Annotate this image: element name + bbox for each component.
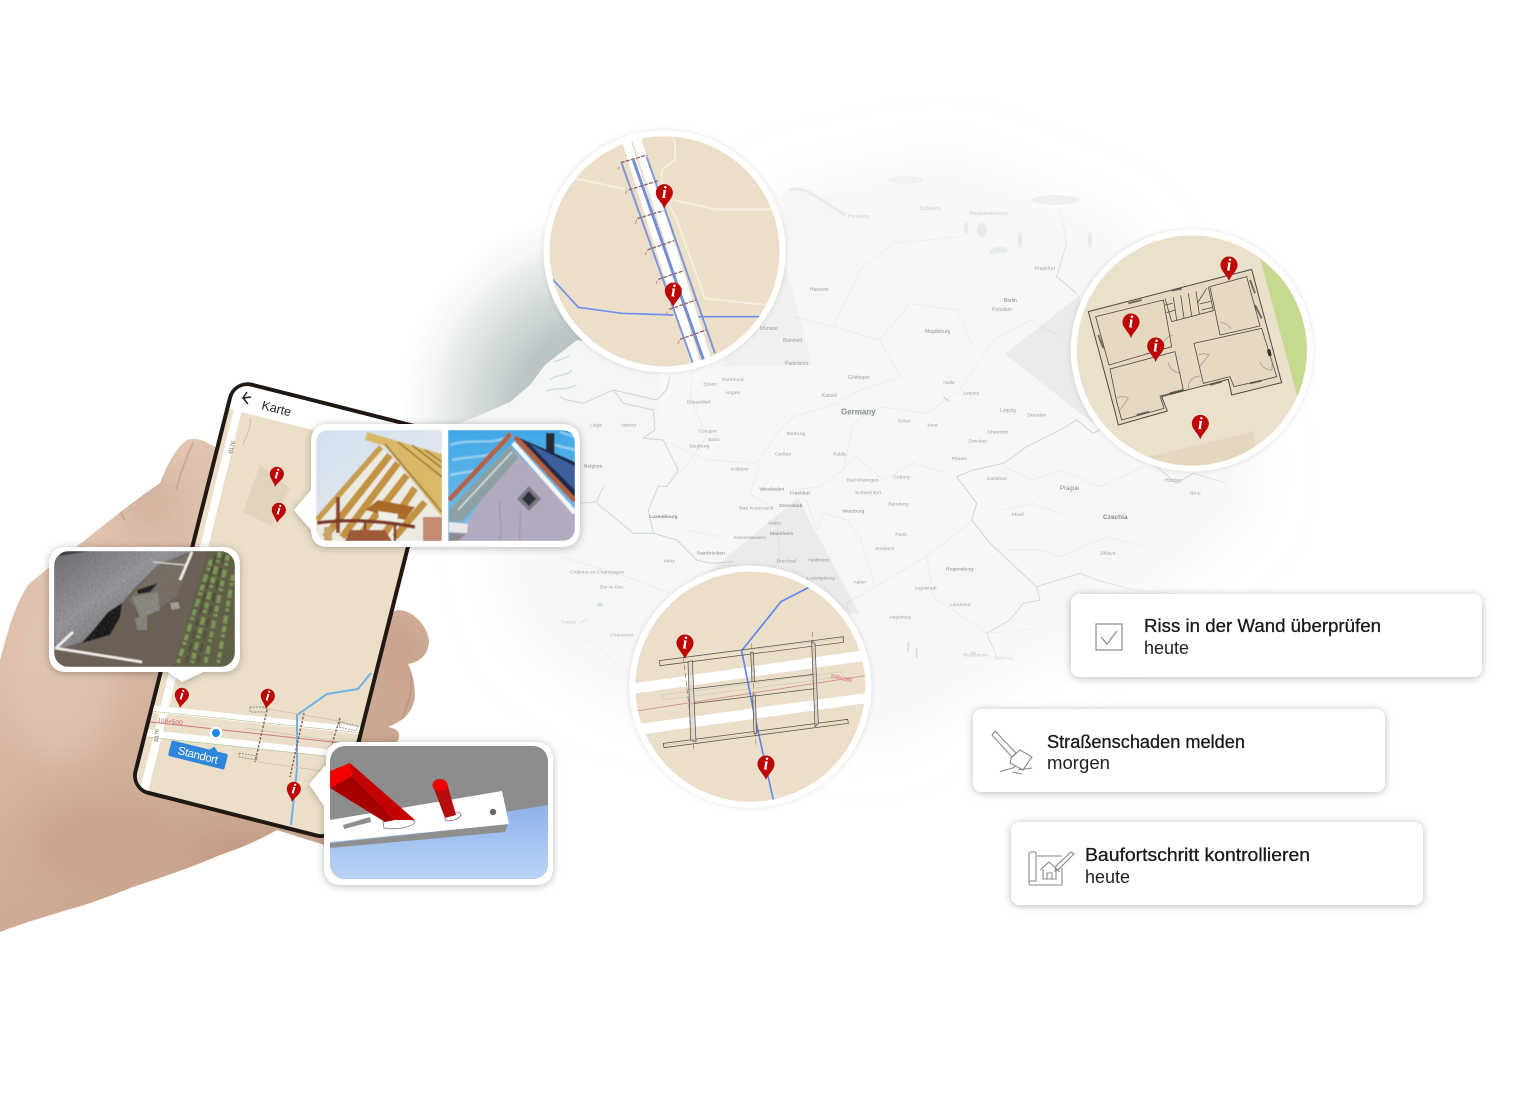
background map of Germany and neighbours: Ansbach xyxy=(875,546,895,552)
circle: road crossing map xyxy=(629,566,871,808)
background map of Germany and neighbours: Belgium xyxy=(584,463,602,468)
background map of Germany and neighbours: Liège xyxy=(590,423,602,429)
background map of Germany and neighbours: Cologne xyxy=(698,428,717,434)
background map of Germany and neighbours: Berlin xyxy=(1004,298,1017,304)
background map of Germany and neighbours: Aalen xyxy=(853,580,866,586)
background map of Germany and neighbours: Saarbrücken xyxy=(697,550,725,556)
background map of Germany and neighbours: Salzburg xyxy=(994,655,1014,661)
phone map screen: 108+500 xyxy=(157,717,183,727)
background map of Germany and neighbours: Czechia xyxy=(1103,514,1128,521)
pin: i xyxy=(1227,255,1232,274)
callout: road damage photo xyxy=(49,547,240,682)
pin xyxy=(656,183,673,209)
background map of Germany and neighbours: Ingolstadt xyxy=(915,585,937,591)
task card: Baufortschritt xyxy=(1011,822,1423,905)
background map of Germany and neighbours: Bamberg xyxy=(888,502,909,508)
background map of Germany and neighbours: Mannheim xyxy=(770,531,793,537)
background map of Germany and neighbours: Plauen xyxy=(952,456,967,462)
callout: roof photos xyxy=(294,424,580,547)
phone header label: Karte xyxy=(260,398,293,419)
pin: i xyxy=(764,754,769,773)
background map of Germany and neighbours: Hanover xyxy=(810,287,829,293)
background map of Germany and neighbours: Hamburg xyxy=(848,214,869,220)
background map of Germany and neighbours: Darmstadt xyxy=(779,503,803,509)
background map of Germany and neighbours: Fulda xyxy=(833,451,846,457)
background map of Germany and neighbours xyxy=(423,176,1227,708)
background map of Germany and neighbours: Würzburg xyxy=(843,509,864,515)
pin: i xyxy=(274,466,280,483)
background map of Germany and neighbours: Erfurt xyxy=(898,418,911,424)
icon: checkbox xyxy=(1096,624,1122,650)
background map of Germany and neighbours: Germany xyxy=(841,408,876,417)
task card: Straßenschaden xyxy=(973,709,1385,792)
background map of Germany and neighbours: Kaiserslautern xyxy=(734,535,766,541)
circle: road crossing map: 100+280 xyxy=(830,673,853,684)
background map of Germany and neighbours: Magdeburg xyxy=(925,329,951,335)
background map of Germany and neighbours: Leipzig xyxy=(1000,408,1016,414)
background map of Germany and neighbours: Jena xyxy=(927,423,938,429)
background map of Germany and neighbours: Carlsbad xyxy=(987,476,1007,482)
background map of Germany and neighbours: Coburg xyxy=(893,474,910,480)
card title: Straßenschaden melden xyxy=(1047,732,1245,752)
pin xyxy=(173,687,190,709)
background map of Germany and neighbours: Paderborn xyxy=(785,361,809,367)
pin xyxy=(757,754,774,780)
background map of Germany and neighbours: Schweinfurt xyxy=(855,490,882,496)
circle: road corridor map xyxy=(543,130,785,372)
pin xyxy=(285,781,302,803)
background map of Germany and neighbours: Metz xyxy=(664,558,675,564)
phone map screen xyxy=(136,386,406,834)
phone map screen: B176 xyxy=(228,441,237,454)
background map of Germany and neighbours: Chaumont xyxy=(610,633,634,639)
background map of Germany and neighbours: Wiesbaden xyxy=(759,487,784,493)
background map of Germany and neighbours: Ludwigsburg xyxy=(807,575,835,581)
background map of Germany and neighbours: Plzeň xyxy=(1012,512,1024,518)
phone map screen: B176 xyxy=(154,729,161,742)
background map of Germany and neighbours: Regensburg xyxy=(946,566,973,572)
background map of Germany and neighbours: Châlons-en-Champagne xyxy=(570,569,625,575)
background map of Germany and neighbours: Bar-le-Duc xyxy=(600,584,624,590)
card due date: heute xyxy=(1085,867,1130,887)
circle: floor plan map xyxy=(1071,229,1327,480)
background map of Germany and neighbours: Düsseldorf xyxy=(687,399,711,405)
background map of Germany and neighbours: Koblenz xyxy=(731,467,749,473)
pin xyxy=(268,466,285,488)
location dot xyxy=(210,726,222,740)
card due date: heute xyxy=(1144,638,1189,658)
background map of Germany and neighbours: Namur xyxy=(621,423,637,429)
map wedge: circle three xyxy=(705,498,860,615)
pin: i xyxy=(683,633,688,652)
background map of Germany and neighbours: Luxembourg xyxy=(649,514,678,519)
card due date: morgen xyxy=(1047,753,1110,773)
pin xyxy=(665,281,682,307)
pin: i xyxy=(662,183,667,202)
map wedge: circle two xyxy=(1005,295,1095,425)
pin: i xyxy=(179,687,185,704)
background map of Germany and neighbours: Jihlava xyxy=(1100,551,1116,557)
background map of Germany and neighbours: Halle xyxy=(943,380,955,386)
background map of Germany and neighbours: Landshut xyxy=(950,602,971,608)
pin xyxy=(1220,255,1237,281)
background map of Germany and neighbours: Troyes xyxy=(561,619,577,625)
background map of Germany and neighbours: Frankfurt xyxy=(1035,266,1056,272)
pin: i xyxy=(1198,414,1203,433)
background map of Germany and neighbours: Prague xyxy=(1060,486,1080,492)
map wedge: circle one xyxy=(720,262,812,367)
background map of Germany and neighbours: Bad Kissingen xyxy=(847,478,879,484)
hand holding phone xyxy=(0,430,440,940)
pin: i xyxy=(1153,336,1158,355)
pin: i xyxy=(265,688,271,705)
background map of Germany and neighbours: Rosenheim xyxy=(963,653,989,659)
pin: i xyxy=(291,781,297,798)
callout: 3D model view xyxy=(309,742,553,885)
photo: house gable xyxy=(448,430,575,541)
task card: Riss in der Wand xyxy=(1071,594,1482,677)
background map of Germany and neighbours: Kassel xyxy=(822,393,837,399)
background map of Germany and neighbours: Bielefeld xyxy=(783,338,802,344)
icon: house plan and pencil xyxy=(1029,852,1074,885)
location label: Standort xyxy=(176,745,220,767)
background map of Germany and neighbours: Potsdam xyxy=(992,307,1012,313)
photo: roof framing xyxy=(316,430,442,541)
background map of Germany and neighbours: Dortmund xyxy=(722,377,744,383)
pin: i xyxy=(671,281,676,300)
background map of Germany and neighbours: Neubrandenburg xyxy=(970,211,1008,217)
icon: hammer xyxy=(992,731,1032,774)
background map of Germany and neighbours: Brno xyxy=(1190,491,1201,497)
pin xyxy=(676,633,693,659)
background map of Germany and neighbours: Frankfurt xyxy=(790,490,811,496)
pin xyxy=(1192,414,1209,439)
background map of Germany and neighbours: Siegburg xyxy=(689,443,710,449)
background map of Germany and neighbours: Münster xyxy=(760,326,778,332)
background map of Germany and neighbours: Gießen xyxy=(775,451,792,457)
background map of Germany and neighbours: Heilbronn xyxy=(808,557,830,563)
background map of Germany and neighbours: Hradec xyxy=(1165,478,1182,484)
pin xyxy=(1147,336,1164,362)
background map of Germany and neighbours: Bruchsal xyxy=(777,559,796,565)
pin: i xyxy=(276,502,282,519)
background map of Germany and neighbours: Chemnitz xyxy=(987,430,1009,436)
location label xyxy=(168,736,229,770)
background map of Germany and neighbours: Dresden xyxy=(1027,413,1046,419)
background map of Germany and neighbours: Schwerin xyxy=(920,206,941,212)
pin: i xyxy=(1129,312,1134,331)
phone xyxy=(133,382,414,838)
background map of Germany and neighbours: Göttingen xyxy=(848,375,870,381)
background map of Germany and neighbours: Augsburg xyxy=(889,614,911,620)
background map of Germany and neighbours: Zwickau xyxy=(968,439,987,445)
phone body xyxy=(129,378,439,842)
card title: Baufortschritt kontrollieren xyxy=(1085,845,1310,865)
pin xyxy=(259,688,276,710)
pin xyxy=(1122,312,1139,338)
background map of Germany and neighbours: Leipzig xyxy=(963,391,979,397)
background map of Germany and neighbours: Marburg xyxy=(787,431,805,437)
background map of Germany and neighbours: Mainz xyxy=(768,520,782,526)
back arrow xyxy=(243,392,251,404)
background map of Germany and neighbours: Bonn xyxy=(708,437,720,443)
card title: Riss in der Wand überprüfen xyxy=(1144,616,1381,636)
pin xyxy=(270,502,287,524)
background map of Germany and neighbours: Fürth xyxy=(895,532,907,538)
background map of Germany and neighbours: Essen xyxy=(703,382,717,388)
background map of Germany and neighbours: Hagen xyxy=(726,390,741,396)
background map of Germany and neighbours: Bad Kreuznach xyxy=(739,505,774,511)
